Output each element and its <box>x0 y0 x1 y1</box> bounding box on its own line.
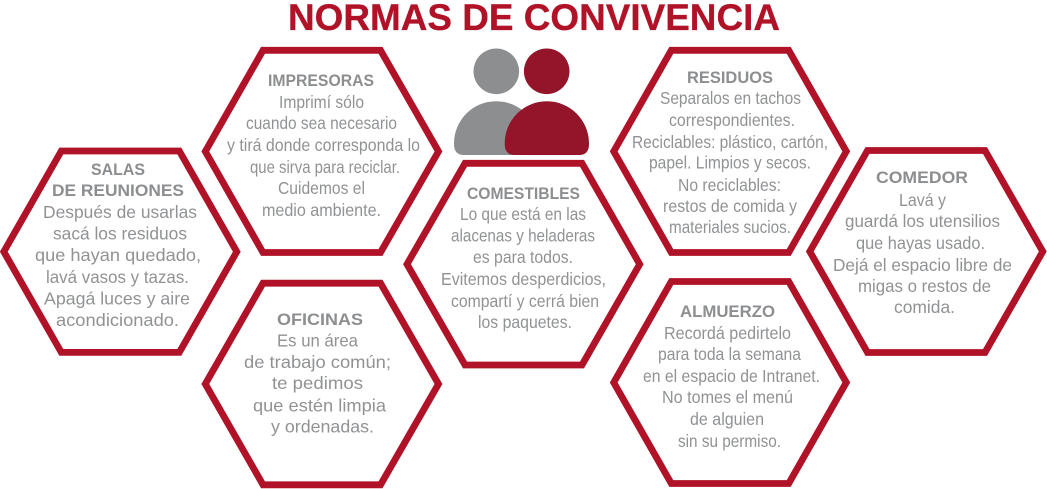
text: residuos: restos de comida y <box>663 196 797 216</box>
panel: oficinas <box>205 283 438 485</box>
text: oficinas: y ordenadas. <box>271 417 374 437</box>
text: impresoras: Cuidemos el <box>278 178 365 198</box>
heading: salas de reuniones: DE REUNIONES <box>52 181 184 200</box>
text: comedor: guardá los utensilios <box>845 211 1000 231</box>
text: impresoras: cuando sea necesario <box>246 113 397 133</box>
heading: almuerzo: ALMUERZO <box>680 302 775 321</box>
text: salas de reuniones: que hayan quedado, <box>35 245 201 265</box>
text: residuos <box>632 88 828 237</box>
text: comedor <box>833 190 1012 317</box>
text: salas de reuniones: Después de usarlas <box>43 202 197 222</box>
text: comedor: Dejá el espacio libre de <box>833 255 1012 275</box>
text: residuos: Separalos en tachos <box>660 88 801 108</box>
heading: residuos: RESIDUOS <box>687 68 773 87</box>
text: comedor: comida. <box>894 297 955 317</box>
heading: salas de reuniones <box>52 160 184 200</box>
text: oficinas: de trabajo común; <box>244 352 391 372</box>
panel: residuos <box>614 50 846 252</box>
text: almuerzo: en el espacio de Intranet. <box>643 366 820 386</box>
heading: oficinas: OFICINAS <box>277 310 363 329</box>
text: impresoras <box>227 92 420 220</box>
text: comestibles: Evitemos desperdicios, <box>441 269 606 289</box>
text: impresoras: y tirá donde corresponda lo <box>227 135 420 155</box>
text: almuerzo: de alguien <box>690 409 764 429</box>
icon: two people <box>454 49 589 155</box>
heading: salas de reuniones: SALAS <box>91 160 145 179</box>
text: comedor: Lavá y <box>899 190 946 210</box>
text: residuos: materiales sucios. <box>669 217 791 237</box>
panel: impresoras <box>205 50 438 252</box>
text: oficinas: que estén limpia <box>253 396 386 416</box>
text: almuerzo: sin su permiso. <box>678 431 781 451</box>
text: residuos: papel. Limpios y secos. <box>649 152 811 172</box>
panel: comestibles <box>407 163 640 365</box>
text: impresoras: Imprimí sólo <box>279 92 364 112</box>
heading: impresoras: IMPRESORAS <box>268 71 374 90</box>
text: oficinas: Es un área <box>277 331 358 351</box>
text: comestibles: es para todos. <box>473 247 573 267</box>
text: residuos: No reciclables: <box>678 175 781 195</box>
text: comestibles <box>441 204 606 332</box>
text: residuos: Reciclables: plástico, cartón, <box>632 132 828 152</box>
text: comestibles: Lo que está en las <box>460 204 586 224</box>
text: salas de reuniones: sacá los residuos <box>53 224 187 244</box>
text: almuerzo <box>643 323 820 451</box>
panel: salas de reuniones <box>4 151 237 352</box>
text: comestibles: compartí y cerrá bien <box>451 291 599 311</box>
panel: almuerzo <box>614 282 846 484</box>
text: comestibles: alacenas y heladeras <box>451 226 595 246</box>
text: salas de reuniones: lavá vasos y tazas. <box>46 267 189 287</box>
text: impresoras: medio ambiente. <box>262 200 381 220</box>
text: comedor: que hayas usado. <box>856 233 985 253</box>
text: salas de reuniones: acondicionado. <box>56 310 179 330</box>
text: almuerzo: Recordá pedirtelo <box>664 323 791 343</box>
text: almuerzo: No tomes el menú <box>662 387 793 407</box>
heading: comestibles: COMESTIBLES <box>467 184 580 203</box>
heading: comedor: COMEDOR <box>876 168 968 187</box>
text: oficinas: te pedimos <box>272 373 363 393</box>
text: salas de reuniones: Apagá luces y aire <box>44 288 190 308</box>
text: almuerzo: para toda la semana <box>658 344 801 364</box>
text: salas de reuniones <box>35 202 201 330</box>
text: comedor: migas o restos de <box>858 276 991 296</box>
text: impresoras: que sirva para reciclar. <box>250 157 400 177</box>
text: comestibles: los paquetes. <box>478 312 572 332</box>
text: residuos: correspondientes. <box>669 110 795 130</box>
panel: comedor <box>810 150 1043 352</box>
text: oficinas <box>244 331 391 437</box>
